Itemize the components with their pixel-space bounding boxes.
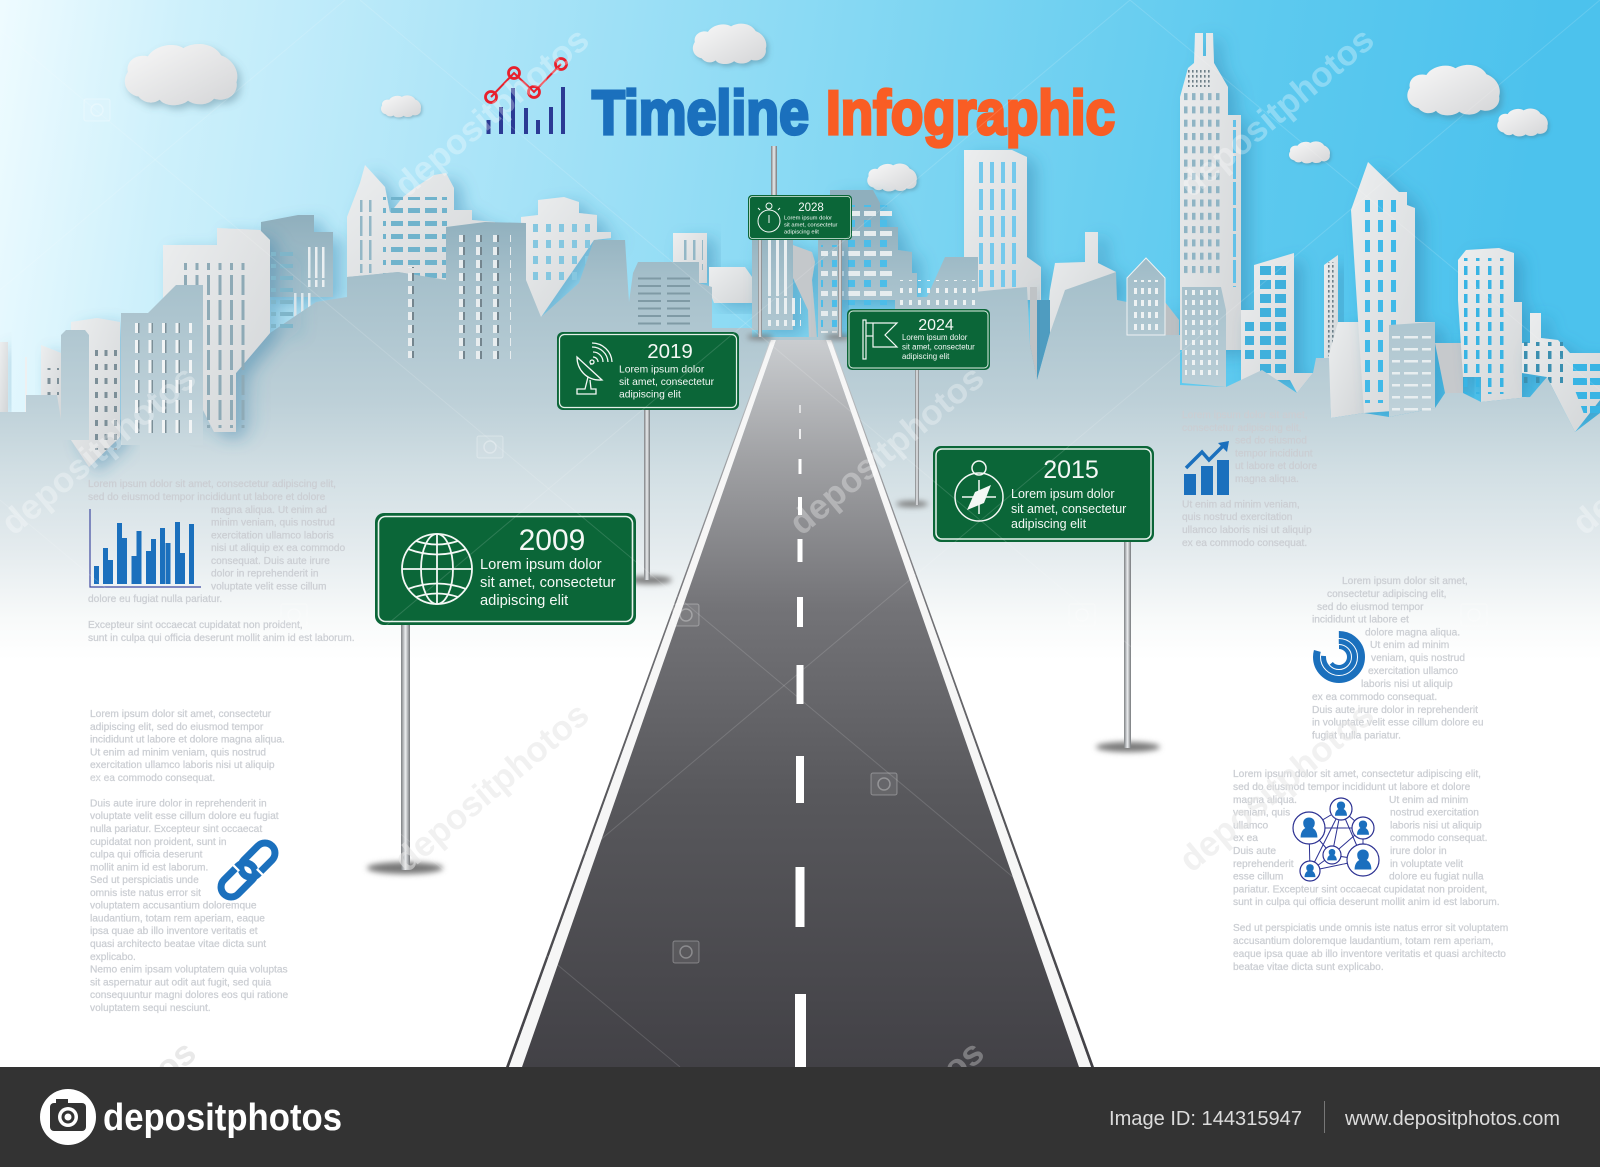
text block: right lower with network icon: Sed ut perspiciatis unde omnis iste natus error sit voluptatem — [1233, 923, 1508, 934]
cloud: right middle — [1289, 141, 1330, 163]
title: Infographic — [826, 79, 1115, 148]
sign 2019 — [557, 332, 739, 584]
text block: right lower with network icon: magna aliqua. — [1233, 795, 1297, 806]
sign 2024: Lorem ipsum dolor — [902, 333, 968, 342]
road edges — [506, 340, 771, 1067]
text block: left upper with bar chart: sunt in culpa qui officia deserunt mollit anim id est laborum. — [88, 633, 355, 644]
lower white page background — [0, 640, 1600, 1070]
watermark overlay: depositphotos — [1172, 20, 1381, 205]
sign 2028 — [747, 146, 852, 340]
icon: compass — [955, 461, 1003, 521]
text block: left lower: ex ea commodo consequat. — [90, 773, 215, 784]
icon: people network — [1293, 798, 1379, 881]
text block: right lower with network icon: eaque ipsa quae ab illo inventore veritatis et quasi architecto — [1233, 949, 1506, 960]
cloud: large left — [125, 44, 237, 105]
sign 2009: adipiscing elit — [480, 593, 568, 609]
icon: satellite dish — [577, 343, 612, 394]
text block: right upper with growth chart: ex ea commodo consequat. — [1182, 538, 1307, 549]
sign 2028: Lorem ipsum dolor — [784, 216, 832, 222]
footer site url: www.depositphotos.com — [1344, 1108, 1560, 1130]
text block: left lower: incididunt ut labore et dolore magna aliqua. — [90, 734, 285, 746]
sign 2028: 2028 — [798, 202, 824, 214]
sign 2019: 2019 — [647, 340, 693, 363]
text block: left lower: culpa qui officia deserunt — [90, 850, 203, 860]
back skyline buildings — [0, 33, 1600, 432]
text block: right lower with network icon: accusantium doloremque laudantium, totam rem aperiam, — [1233, 936, 1493, 947]
text block: left lower: sit aspernatur aut odit aut fugit, sed quia — [90, 978, 272, 988]
text block: left lower: laudantium, totam rem aperiam, eaque — [90, 914, 265, 924]
footer bar — [0, 1067, 1600, 1167]
sky background — [0, 0, 1600, 700]
text block: left lower: voluptate velit esse cillum dolore eu fugiat — [90, 811, 279, 822]
sign 2024 — [847, 309, 990, 507]
text block: right upper with growth chart: sed do eiusmod — [1235, 436, 1307, 446]
text block: right lower with network icon: irure dolor in — [1390, 846, 1447, 857]
text block: right upper with growth chart — [1182, 410, 1317, 549]
text block: left upper with bar chart: magna aliqua. Ut enim ad — [211, 505, 327, 516]
text block: left lower — [90, 709, 289, 1014]
text block: right upper with growth chart: Ut enim ad minim veniam, — [1182, 500, 1300, 510]
text block: left lower: adipiscing elit, sed do eiusmod tempor — [90, 722, 264, 733]
text block: right middle with radial chart: exercitation ullamco — [1368, 666, 1458, 677]
text block: left lower: voluptatem sequi nesciunt. — [90, 1003, 211, 1014]
icon: radial chart — [1316, 634, 1362, 680]
text block: left lower: voluptatem accusantium doloremque — [90, 900, 257, 912]
text block: right lower with network icon: sunt in culpa qui officia deserunt mollit anim id est laborum. — [1233, 897, 1500, 908]
cloud: center — [867, 163, 917, 191]
text block: left upper with bar chart: Lorem ipsum dolor sit amet, consectetur adipiscing elit, — [88, 479, 336, 490]
sign 2028: sit amet, consectetur — [784, 222, 838, 228]
sign 2024: sit amet, consectetur — [902, 342, 975, 352]
text block: right middle with radial chart: ex ea commodo consequat. — [1312, 692, 1437, 703]
icon: stopwatch — [758, 203, 780, 232]
text block: right middle with radial chart: fugiat nulla pariatur. — [1312, 730, 1401, 742]
text block: right lower with network icon: veniam, quis — [1233, 808, 1290, 818]
footer logo icon — [40, 1089, 96, 1145]
icon: flag — [863, 320, 897, 359]
text block: right lower with network icon: Duis aute — [1233, 846, 1276, 857]
title chart icon — [486, 58, 566, 134]
text block: right lower with network icon: Ut enim ad minim — [1389, 795, 1468, 806]
cloud: small left — [381, 95, 421, 117]
watermark overlay: depositphotos — [782, 358, 991, 543]
text block: right lower with network icon: ex ea — [1233, 833, 1258, 844]
sign 2009: 2009 — [519, 524, 585, 557]
sign 2019: adipiscing elit — [619, 390, 681, 400]
text block: right middle with radial chart: incididunt ut labore et — [1312, 614, 1409, 626]
text block: right lower with network icon: ullamco — [1233, 820, 1268, 832]
watermark overlay: depositphotos — [387, 695, 596, 880]
text block: right middle with radial chart: consectetur adipiscing elit, — [1327, 589, 1446, 600]
text block: left lower: nulla pariatur. Excepteur sint occaecat — [90, 824, 262, 835]
sign 2019: sit amet, consectetur — [619, 377, 715, 388]
road — [506, 340, 1094, 1067]
asphalt — [522, 340, 1079, 1067]
text block: left upper with bar chart: consequat. Duis aute irure — [211, 556, 330, 567]
text block: left upper with bar chart: sed do eiusmod tempor incididunt ut labore et dolore — [88, 492, 326, 503]
sign 2015: sit amet, consectetur — [1011, 502, 1126, 516]
text block: right middle with radial chart: dolore magna aliqua. — [1365, 628, 1460, 638]
text block: right lower with network icon: nostrud exercitation — [1390, 808, 1479, 818]
text block: left upper with bar chart: dolor in reprehenderit in — [211, 568, 319, 580]
text block: left lower: Ut enim ad minim veniam, quis nostrud — [90, 748, 266, 758]
cloud: right large — [1407, 65, 1500, 115]
text block: right middle with radial chart: Lorem ipsum dolor sit amet, — [1342, 576, 1468, 587]
center building behind 2028 sign — [752, 240, 801, 330]
text block: right middle with radial chart — [1312, 576, 1484, 742]
text block: left lower: Duis aute irure dolor in reprehenderit in — [90, 798, 267, 810]
text block: left upper with bar chart: Excepteur sint occaecat cupidatat non proident, — [88, 620, 303, 631]
sign 2009: sit amet, consectetur — [480, 575, 616, 591]
icon: bar chart — [90, 509, 201, 587]
text block: right middle with radial chart: sed do eiusmod tempor — [1317, 602, 1424, 613]
text block: left lower: ipsa quae ab illo inventore veritatis et — [90, 926, 258, 937]
text block: left upper with bar chart: dolore eu fugiat nulla pariatur. — [88, 594, 222, 605]
text block: right lower with network icon: in voluptate velit — [1390, 859, 1463, 870]
icon: chain link — [214, 836, 282, 904]
text block: right lower with network icon: pariatur. Excepteur sint occaecat cupidatat non proident, — [1233, 884, 1487, 896]
sign 2015: Lorem ipsum dolor — [1011, 487, 1115, 501]
sign 2015: 2015 — [1043, 456, 1099, 484]
text block: right upper with growth chart: tempor incididunt — [1235, 448, 1313, 460]
text block: left upper with bar chart — [88, 479, 355, 644]
title: Timeline — [592, 79, 809, 148]
sign 2015 — [933, 446, 1160, 752]
watermark overlay: depositphotos — [1172, 695, 1381, 880]
text block: right upper with growth chart: ut labore et dolore — [1235, 461, 1317, 472]
text block: right middle with radial chart: laboris nisi ut aliquip — [1361, 679, 1453, 690]
text block: right upper with growth chart: Lorem ipsum dolor sit amet, — [1182, 410, 1308, 421]
text block: left lower: omnis iste natus error sit — [90, 888, 201, 899]
text block: right middle with radial chart: Duis aute irure dolor in reprehenderit — [1312, 705, 1478, 716]
title — [592, 79, 1115, 148]
ground and skyline silhouette — [0, 240, 1600, 660]
text block: right upper with growth chart: quis nostrud exercitation — [1182, 512, 1292, 523]
text block: left lower: consequuntur magni dolores eos qui ratione — [90, 990, 289, 1001]
centre dashes — [795, 405, 806, 1067]
text block: left upper with bar chart: nisi ut aliquip ex ea commodo — [211, 543, 346, 554]
front paper buildings — [61, 222, 1435, 467]
text block: right middle with radial chart: veniam, quis nostrud — [1371, 653, 1465, 664]
text block: right lower with network icon: dolore eu fugiat nulla — [1389, 872, 1484, 882]
text block: left lower: explicabo. — [90, 952, 136, 963]
text block: left lower: cupidatat non proident, sunt in — [90, 837, 226, 848]
cloud: right small — [1497, 108, 1548, 136]
sign 2015: adipiscing elit — [1011, 517, 1087, 531]
text block: left lower: Sed ut perspiciatis unde — [90, 875, 199, 886]
sign 2009: Lorem ipsum dolor — [480, 557, 602, 573]
icon: globe — [402, 534, 472, 604]
watermark overlay: depositphotos — [387, 20, 596, 205]
text block: left lower: Lorem ipsum dolor sit amet, consectetur — [90, 709, 272, 720]
text block: right lower with network icon: esse cillum — [1233, 872, 1283, 882]
text block: right lower with network icon: sed do eiusmod tempor incididunt ut labore et dolore — [1233, 782, 1471, 793]
footer logo wordmark: depositphotos — [103, 1097, 342, 1139]
sign 2024: 2024 — [918, 317, 954, 334]
text block: right lower with network icon: beatae vitae dicta sunt explicabo. — [1233, 962, 1384, 973]
text block: right middle with radial chart: Ut enim ad minim — [1370, 640, 1449, 651]
text block: left upper with bar chart: minim veniam, quis nostrud — [211, 518, 335, 528]
text block: right lower with network icon — [1233, 769, 1508, 973]
text block: right upper with growth chart: consectetur adipiscing elit, — [1182, 423, 1301, 434]
text block: left lower: quasi architecto beatae vitae dicta sunt — [90, 939, 266, 950]
cloud: top center — [693, 24, 766, 64]
text block: left upper with bar chart: voluptate velit esse cillum — [211, 582, 327, 592]
text block: right middle with radial chart: in voluptate velit esse cillum dolore eu — [1312, 718, 1484, 728]
icon: growth chart — [1184, 441, 1229, 495]
text block: right lower with network icon: Lorem ipsum dolor sit amet, consectetur adipiscing elit, — [1233, 769, 1481, 780]
footer image id: Image ID: 144315947 — [1109, 1108, 1302, 1130]
text block: right upper with growth chart: ullamco laboris nisi ut aliquip — [1182, 525, 1312, 536]
sign 2019: Lorem ipsum dolor — [619, 364, 705, 376]
sign 2028: adipiscing elit — [784, 230, 819, 236]
sign 2009 — [367, 513, 636, 874]
text block: right lower with network icon: reprehenderit — [1233, 859, 1294, 870]
text block: left lower: Nemo enim ipsam voluptatem quia voluptas — [90, 964, 288, 976]
text block: right lower with network icon: laboris nisi ut aliquip — [1390, 820, 1482, 832]
text block: right upper with growth chart: magna aliqua. — [1235, 474, 1299, 485]
sign 2024: adipiscing elit — [902, 352, 950, 361]
text block: left lower: exercitation ullamco laboris nisi ut aliquip — [90, 760, 275, 771]
text block: right lower with network icon: commodo consequat. — [1390, 833, 1487, 844]
text block: left upper with bar chart: exercitation ullamco laboris — [211, 530, 334, 542]
text block: left lower: mollit anim id est laborum. — [90, 862, 208, 874]
watermark overlay: depositphotos — [0, 358, 203, 543]
